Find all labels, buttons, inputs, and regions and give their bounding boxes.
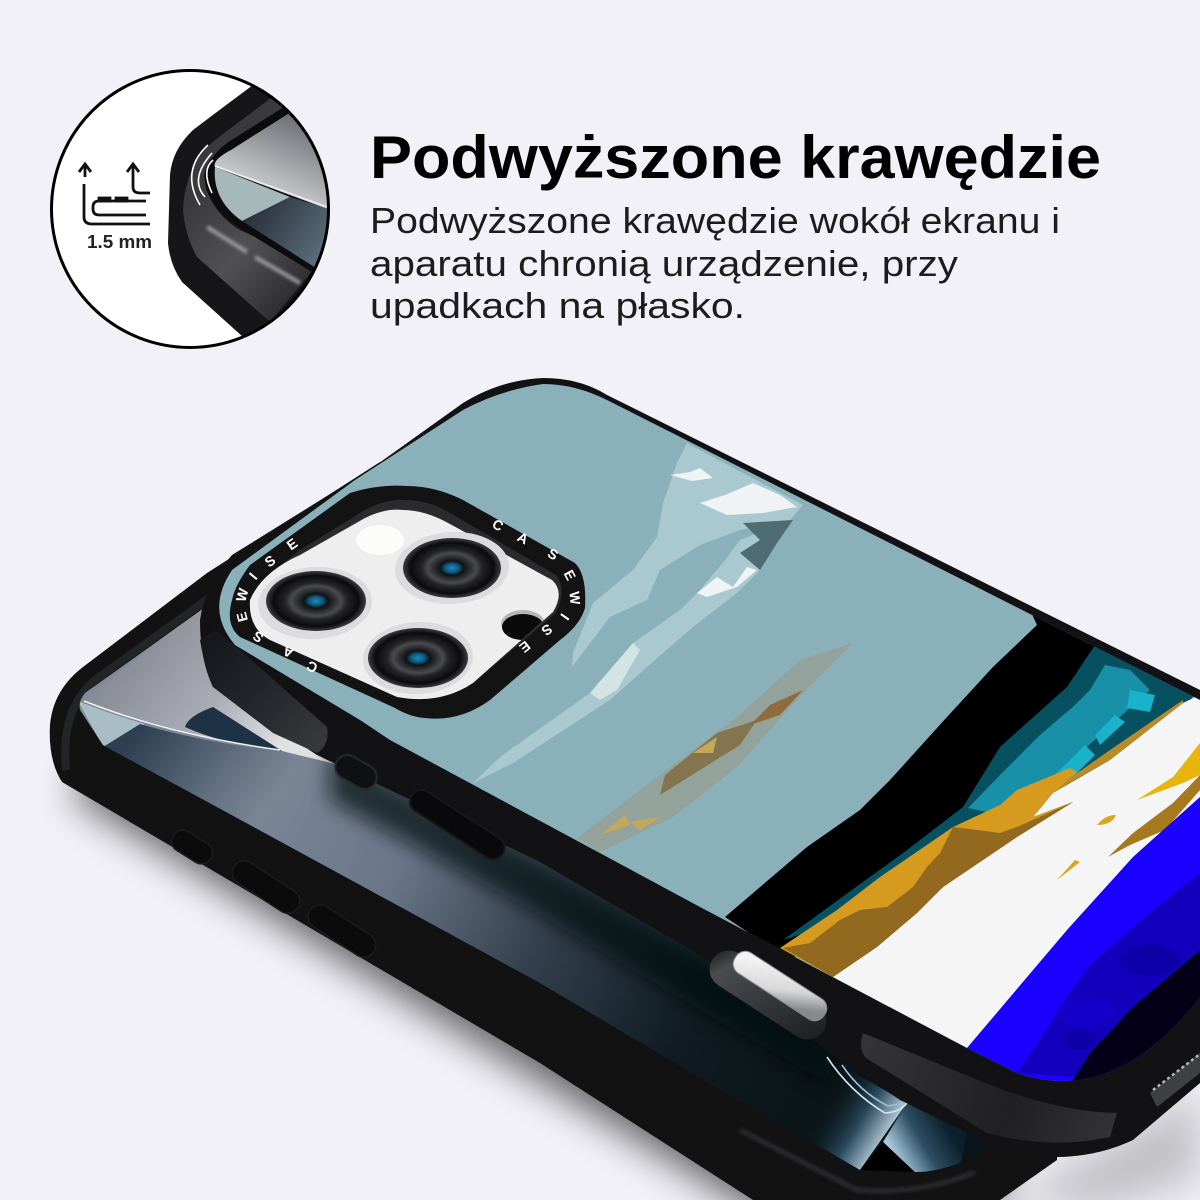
blue paint: [967, 797, 1200, 1085]
right floor shadow: [1010, 1090, 1200, 1200]
pale teal wedge: [78, 701, 145, 747]
ring brand text: I: [246, 569, 260, 583]
bottom edge gloss: [740, 1130, 975, 1191]
bumper highlight: [65, 497, 350, 770]
gold stroke upper: [1053, 700, 1183, 793]
black band: [725, 610, 1110, 960]
1.5 mm label: 1.5 mm: [87, 232, 152, 252]
speaker holes: [1150, 1053, 1200, 1107]
bumper close-up: [168, 86, 327, 336]
white patch one: [700, 483, 797, 515]
description: aparatu chronią urządzenie, przy: [370, 243, 958, 284]
camera ring: [230, 486, 585, 719]
ring brand text: [233, 516, 584, 676]
bright core two: [590, 643, 640, 700]
rear phone: [50, 462, 1160, 1200]
front phone: [200, 370, 1200, 1157]
yellow accents: [1137, 743, 1200, 800]
white patch two: [697, 567, 757, 597]
lens three: [361, 619, 475, 697]
rear phone bumper: [50, 462, 1060, 1200]
charging port: [729, 947, 831, 1025]
blue blots: [1057, 944, 1180, 1050]
volume buttons: [168, 826, 380, 962]
translucent bumper: [183, 95, 317, 322]
circle outline: [52, 70, 328, 348]
screen artwork: [200, 370, 1200, 1090]
dark patch: [740, 520, 793, 570]
screen navy: [242, 197, 332, 268]
description: upadkach na płasko.: [370, 285, 745, 326]
front bumper: [200, 378, 1200, 1157]
ring brand text: C: [490, 516, 506, 534]
screen grey: [214, 114, 327, 208]
pale band two: [474, 534, 760, 782]
bright teal accents: [1045, 690, 1155, 802]
phone shadow: [70, 730, 1000, 1200]
gold leaf stroke: [577, 643, 853, 852]
mid teal paint: [968, 665, 1150, 815]
ring brand text: W: [566, 591, 584, 606]
flash: [356, 525, 404, 555]
ring brand text: A: [280, 643, 296, 661]
charging port surround: [702, 943, 834, 1047]
raised edge icon: [79, 164, 150, 224]
ring brand text: E: [516, 638, 534, 656]
inset circle: [51, 60, 340, 348]
ring brand text: E: [233, 610, 251, 624]
white field: [833, 695, 1200, 1048]
navy cutout: [185, 707, 282, 751]
corner side texture: [861, 1033, 1117, 1143]
ring brand text: S: [545, 545, 561, 563]
dark side band: [330, 750, 830, 1085]
pale band one: [572, 443, 803, 667]
white patch small: [670, 468, 713, 481]
protection arcs: [192, 145, 213, 205]
side button: [406, 786, 509, 864]
light arc: [84, 701, 280, 750]
wallpaper glow: [816, 1056, 967, 1172]
brown paint: [783, 802, 1073, 977]
ring brand text: E: [284, 535, 300, 553]
ring brand text: I: [557, 611, 573, 623]
mute switch: [331, 751, 381, 793]
ring brand text: S: [539, 621, 555, 639]
camera module: [230, 486, 585, 719]
ring brand text: S: [262, 552, 278, 570]
reflection line: [215, 166, 330, 208]
ring brand text: W: [233, 586, 252, 603]
camera side bump: [200, 630, 328, 753]
lidar: [501, 610, 545, 640]
screen rim: [204, 108, 314, 272]
dark blue paint: [1017, 873, 1200, 1085]
lens one: [256, 564, 374, 642]
gold paint: [780, 768, 1077, 977]
title: Podwyższone krawędzie: [370, 124, 1101, 191]
ring inner wall: [250, 500, 562, 699]
rear phone glass: [80, 609, 967, 1172]
ring brand text: E: [561, 567, 579, 583]
circle fill: [51, 70, 329, 348]
edge highlights: [207, 227, 300, 283]
camera plate: [250, 510, 559, 699]
ring brand text: S: [250, 628, 266, 646]
lens two: [393, 529, 511, 607]
navy panel: [104, 724, 287, 818]
screen teal: [215, 167, 290, 221]
teal base: [200, 370, 1200, 1090]
teal paint: [783, 645, 1200, 940]
grey reflection: [86, 609, 335, 764]
black paint: [1070, 950, 1200, 1085]
description: [370, 200, 1060, 326]
ring brand text: A: [515, 529, 531, 547]
ring brand text: C: [304, 658, 320, 676]
description: Podwyższone krawędzie wokół ekranu i: [370, 200, 1060, 241]
